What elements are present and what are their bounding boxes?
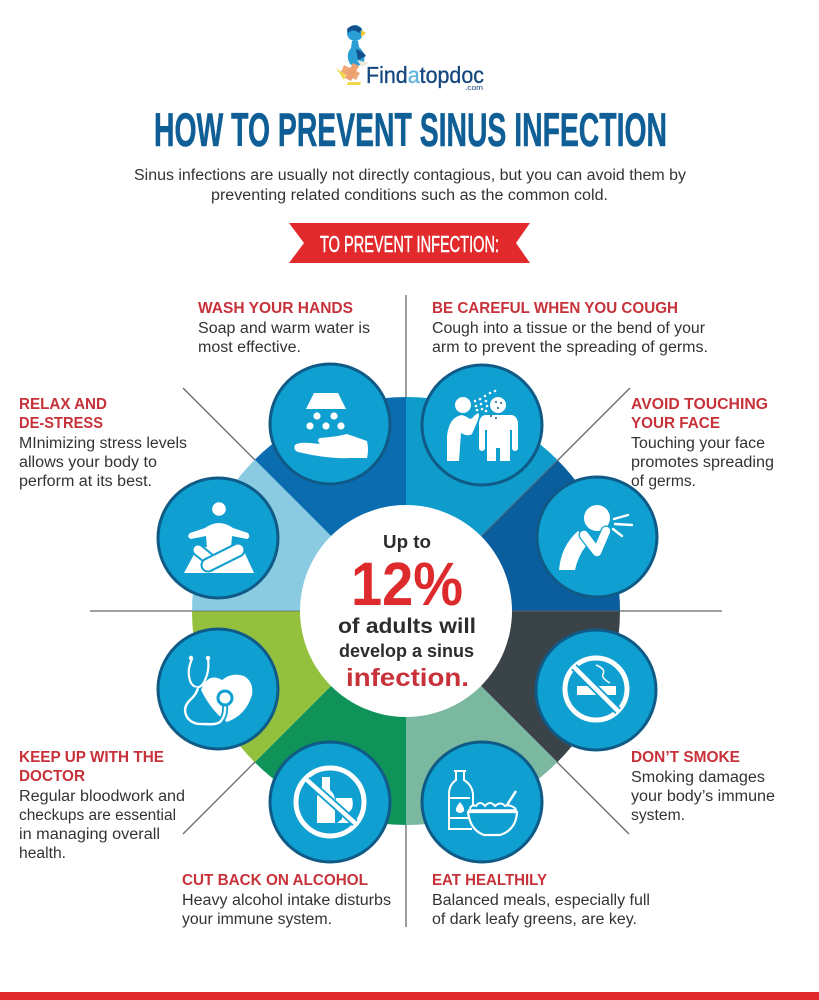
text: keep up with the doctor: Regular bloodwork and <box>19 788 185 805</box>
text: be careful when you cough: BE CAREFUL WHEN YOU COUGH <box>432 300 678 317</box>
text: relax and de-stress: RELAX AND <box>19 396 107 413</box>
icon: healthy food, bottle and bowl <box>422 742 542 862</box>
center circle callout: of adults will <box>338 615 476 638</box>
text: be careful when you cough: arm to prevent the spreading of germs. <box>432 339 708 356</box>
text: avoid touching your face: promotes spreading <box>631 454 774 471</box>
text: keep up with the doctor: checkups are essential <box>19 807 176 824</box>
intro text: Sinus infections are usually not directly contagious, but you can avoid them by <box>134 167 686 184</box>
text: cut back on alcohol <box>182 872 391 928</box>
text: relax and de-stress: perform at its best. <box>19 473 152 490</box>
text: wash your hands: WASH YOUR HANDS <box>198 300 353 317</box>
text: don't smoke: DON’T SMOKE <box>631 749 740 766</box>
logo: Findatopdoc <box>336 25 484 92</box>
text: eat healthily <box>432 872 650 928</box>
text: avoid touching your face: Touching your face <box>631 435 765 452</box>
text: eat healthily: Balanced meals, especially full <box>432 892 650 909</box>
text: avoid touching your face: AVOID TOUCHING <box>631 396 768 413</box>
text: keep up with the doctor: in managing overall <box>19 826 160 843</box>
text: keep up with the doctor <box>19 749 185 862</box>
center circle callout: 12% <box>351 550 463 618</box>
logo wordmark: Findatopdoc <box>366 62 484 88</box>
text: eat healthily: of dark leafy greens, are key. <box>432 911 637 928</box>
intro text: preventing related conditions such as the common cold. <box>211 187 608 204</box>
icon: person sneezing into arm <box>537 477 657 597</box>
footer red bar <box>0 992 819 1000</box>
text: avoid touching your face <box>631 396 774 490</box>
text: cut back on alcohol: Heavy alcohol intake disturbs <box>182 892 391 909</box>
text: don't smoke <box>631 749 775 824</box>
intro text <box>134 167 686 204</box>
text: wash your hands <box>198 300 370 356</box>
text: relax and de-stress: MInimizing stress levels <box>19 435 187 452</box>
divider lines <box>90 295 722 927</box>
text: wash your hands: Soap and warm water is <box>198 320 370 337</box>
center circle callout <box>300 505 512 717</box>
text: don't smoke: Smoking damages <box>631 769 765 786</box>
ring chart: eight coloured segments <box>192 397 620 825</box>
text: cut back on alcohol: your immune system. <box>182 911 332 928</box>
text: cut back on alcohol: CUT BACK ON ALCOHOL <box>182 872 368 889</box>
icon: duck mascot <box>336 25 369 85</box>
text: don't smoke: system. <box>631 807 685 824</box>
center circle callout: infection. <box>346 664 469 692</box>
text: be careful when you cough: Cough into a tissue or the bend of your <box>432 320 705 337</box>
text: be careful when you cough <box>432 300 708 356</box>
text: wash your hands: most effective. <box>198 339 301 356</box>
text: keep up with the doctor: DOCTOR <box>19 768 85 785</box>
logo .com: .com <box>465 85 483 92</box>
text: relax and de-stress <box>19 396 187 490</box>
icon: washing hands <box>270 364 390 484</box>
icon: no smoking <box>536 630 656 750</box>
text: eat healthily: EAT HEALTHILY <box>432 872 548 889</box>
icon: person coughing on another <box>422 365 542 485</box>
banner: to prevent infection: TO PREVENT INFECTION: <box>320 231 499 257</box>
center circle callout: develop a sinus <box>339 641 474 661</box>
icon: no alcohol <box>270 742 390 862</box>
icon: meditating person <box>158 478 278 598</box>
icon: stethoscope and heart <box>158 629 278 749</box>
text: keep up with the doctor: health. <box>19 845 66 862</box>
center circle callout: Up to <box>383 532 431 552</box>
text: avoid touching your face: of germs. <box>631 473 696 490</box>
banner: to prevent infection <box>289 223 530 263</box>
text: keep up with the doctor: KEEP UP WITH THE <box>19 749 164 766</box>
text: don't smoke: your body’s immune <box>631 788 775 805</box>
text: relax and de-stress: allows your body to <box>19 454 157 471</box>
text: avoid touching your face: YOUR FACE <box>631 415 720 432</box>
text: relax and de-stress: DE-STRESS <box>19 415 103 432</box>
